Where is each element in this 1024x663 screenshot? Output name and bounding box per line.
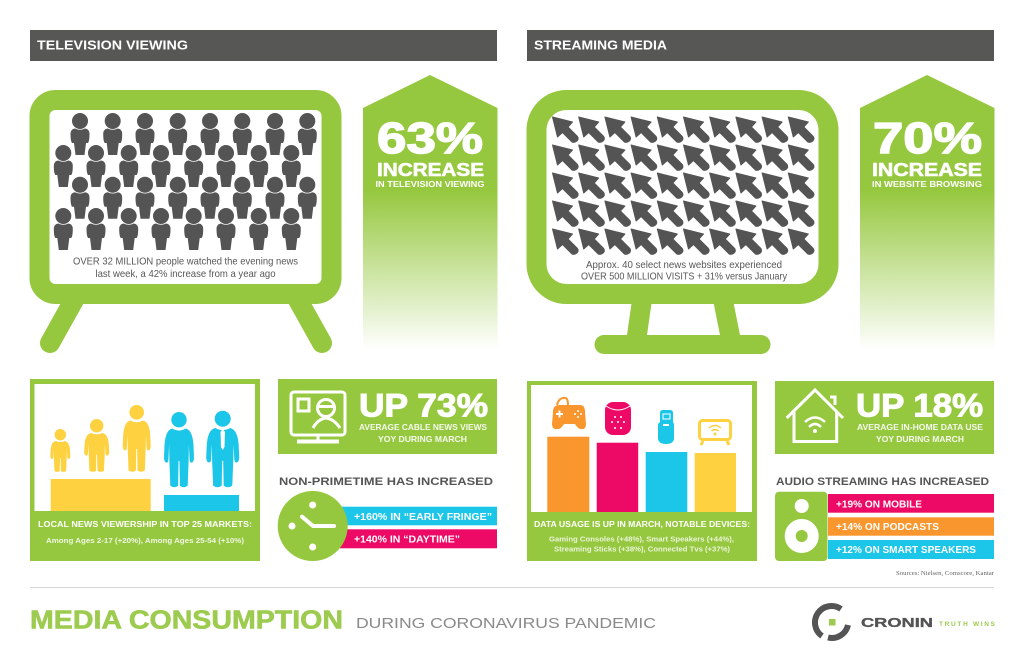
sources note: Sources: Nielsen, Comscore, Kantar — [896, 570, 995, 577]
tv caption — [73, 256, 298, 280]
panel: local news viewership — [30, 379, 260, 561]
panel: up 73%: AVERAGE CABLE NEWS VIEWS — [359, 422, 487, 432]
chart: non-primetime bars: +140% IN “DAYTIME” — [354, 534, 460, 546]
chart: non-primetime bars: +160% IN “EARLY FRINGE” — [354, 512, 492, 523]
tv frame — [40, 100, 332, 294]
header: streaming media — [527, 30, 994, 61]
icon: yellow figures — [50, 405, 151, 472]
panel caption: Streaming Sticks (+38%), Connected Tvs (+37%) — [554, 546, 730, 554]
callout: 70% increase: IN WEBSITE BROWSING — [872, 179, 982, 189]
bar: connected tvs — [695, 453, 736, 512]
icon: streaming stick — [658, 410, 674, 444]
callout: 70% increase: INCREASE — [872, 160, 982, 180]
icon: clock — [278, 491, 348, 561]
panel: data usage — [527, 381, 757, 561]
panel caption: Gaming Consoles (+48%), Smart Speakers (+44%), — [549, 536, 734, 544]
chart: non-primetime bars — [340, 507, 497, 548]
heading: audio streaming: AUDIO STREAMING HAS INCREASED — [776, 476, 989, 488]
bar: smart speakers — [597, 443, 638, 512]
panel: up 18%: UP 18% — [856, 388, 983, 424]
panel caption — [38, 520, 252, 545]
panel: up 73%: YOY DURING MARCH — [378, 434, 467, 444]
panel caption: Among Ages 2-17 (+20%), Among Ages 25-54 (+10%) — [46, 538, 244, 545]
monitor caption: Approx. 40 select news websites experienced — [586, 259, 782, 271]
monitor caption — [581, 259, 788, 282]
heading: non-primetime: NON-PRIMETIME HAS INCREASED — [279, 476, 493, 488]
chart: audio streaming bars: +19% ON MOBILE — [836, 500, 922, 510]
panel: up 18% — [775, 381, 994, 454]
callout: 70% increase: 70% — [873, 114, 982, 163]
bar: streaming sticks — [646, 452, 687, 512]
chart: audio streaming bars — [828, 494, 994, 559]
logo: cronin: CRONIN — [861, 616, 933, 630]
panel: up 18%: AVERAGE IN-HOME DATA USE — [857, 422, 983, 432]
icon: speaker — [775, 492, 828, 561]
blue bar — [164, 495, 239, 511]
header: television viewing: TELEVISION VIEWING — [37, 38, 188, 52]
panel: up 73% — [278, 379, 497, 454]
header: streaming media: STREAMING MEDIA — [534, 38, 668, 52]
chart: audio streaming bars: +14% ON PODCASTS — [836, 522, 939, 533]
icon: connected tv — [700, 420, 730, 445]
panel caption: LOCAL NEWS VIEWERSHIP IN TOP 25 MARKETS: — [38, 520, 252, 529]
icon: tv legs — [50, 300, 322, 343]
chart: audio streaming bars: +12% ON SMART SPEAKERS — [836, 545, 976, 556]
tv caption: last week, a 42% increase from a year ago — [96, 268, 276, 280]
logo: cronin: TRUTH WINS — [939, 621, 996, 628]
icon: blue figures — [164, 411, 239, 487]
icon: tie — [220, 429, 225, 450]
bar: gaming consoles — [547, 437, 589, 512]
icon: smart speaker — [605, 402, 631, 435]
title: DURING CORONAVIRUS PANDEMIC — [356, 615, 656, 632]
panel: television — [40, 100, 332, 343]
icon: crowd of people — [54, 113, 317, 250]
yellow bar — [51, 479, 151, 511]
tv caption: OVER 32 MILLION people watched the evening news — [73, 256, 298, 268]
panel caption: DATA USAGE IS UP IN MARCH, NOTABLE DEVICES: — [534, 520, 750, 529]
callout: 63% increase: INCREASE — [377, 160, 484, 180]
callout: 63% increase — [363, 75, 498, 350]
panel caption — [534, 520, 750, 554]
panel: up 18%: YOY DURING MARCH — [876, 434, 964, 444]
title: MEDIA CONSUMPTION — [30, 604, 343, 634]
logo mark — [815, 606, 848, 638]
header: television viewing — [30, 30, 497, 61]
title — [30, 604, 656, 634]
icon: monitor with person — [291, 392, 345, 442]
icon: monitor stand — [594, 300, 770, 354]
panel: streaming monitor — [536, 100, 828, 354]
callout: 63% increase: IN TELEVISION VIEWING — [376, 179, 485, 189]
callout: 70% increase — [860, 75, 994, 350]
panel: up 73%: UP 73% — [359, 388, 488, 424]
callout: 63% increase: 63% — [377, 114, 483, 163]
icon: grid of cursors — [552, 117, 814, 254]
monitor caption: OVER 500 MILLION VISITS + 31% versus January — [581, 270, 788, 282]
logo: cronin — [815, 606, 996, 638]
monitor frame — [536, 100, 828, 294]
icon: game controller — [552, 398, 586, 429]
icon: house with wifi — [787, 390, 843, 442]
